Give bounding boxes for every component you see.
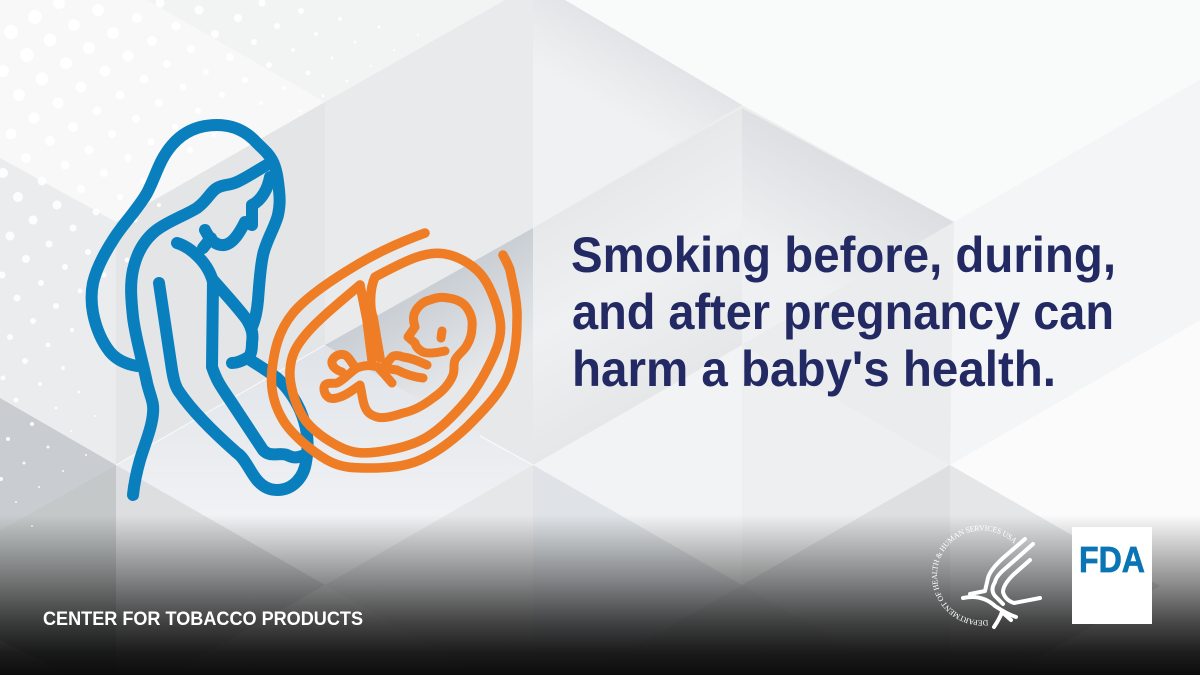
icon: neck bbox=[203, 238, 211, 248]
illustration: pregnant woman outline bbox=[92, 125, 308, 495]
logo: FDA bbox=[1072, 527, 1152, 624]
icon: fetus body bbox=[324, 297, 472, 418]
icon: shoulder and arm bbox=[177, 243, 302, 457]
logo: FDA: FDA bbox=[1079, 539, 1145, 580]
bottom dark fade bbox=[0, 515, 1200, 675]
footer label: CENTER FOR TOBACCO PRODUCTS bbox=[43, 608, 363, 630]
icon: outer hair bbox=[92, 125, 280, 366]
heading bbox=[571, 227, 1116, 397]
icon: umbilical line bbox=[360, 285, 372, 360]
icon: breast bbox=[213, 280, 252, 363]
icon: outer womb line bbox=[271, 233, 517, 468]
icon: face profile bbox=[205, 177, 270, 245]
icon: inner hair and back bbox=[131, 163, 270, 495]
icon: belly and back arm bbox=[159, 283, 308, 490]
heading: Smoking before, during, bbox=[571, 227, 1116, 283]
heading: harm a baby's health. bbox=[572, 341, 1056, 397]
logo: HHS seal: DEPARTMENT OF HEALTH & HUMAN SERVICES USA bbox=[932, 525, 1016, 626]
illustration: womb lines bbox=[271, 233, 517, 468]
heading: and after pregnancy can bbox=[572, 284, 1114, 340]
background: dot pattern bbox=[0, 0, 419, 527]
icon: inner womb line bbox=[290, 253, 501, 453]
